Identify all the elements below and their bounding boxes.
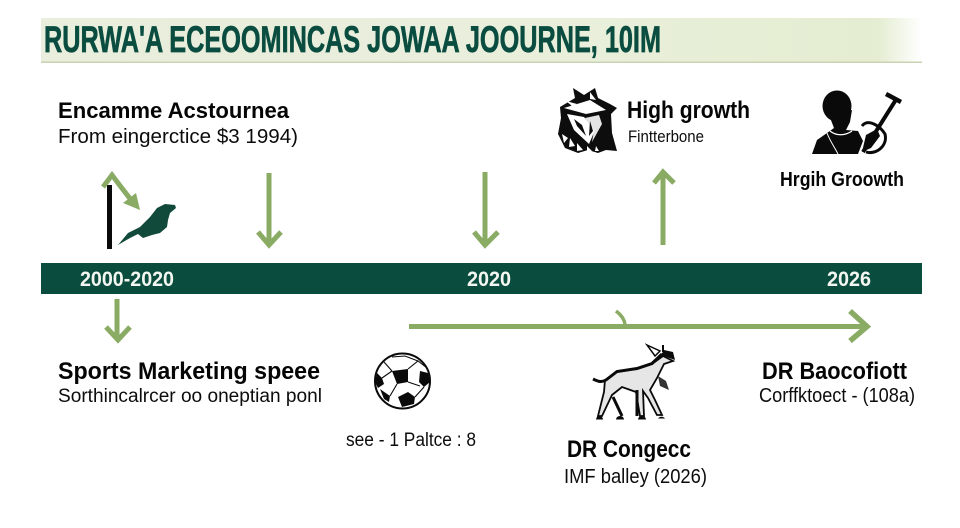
text block: dr congo: IMF balley (2026) — [564, 466, 707, 488]
text block: high growth — [627, 97, 750, 146]
text block: sports marketing — [58, 358, 322, 407]
text block: sports marketing: Sorthincalrcer oo oneptian ponl — [58, 386, 322, 407]
year label 2000-2020: 2000-2020 — [80, 268, 174, 291]
arrow: down below bar — [106, 299, 130, 340]
text block: high growth: High growth — [627, 97, 750, 124]
timeline bar — [41, 263, 922, 294]
text block: high growth: Fintterbone — [628, 127, 704, 146]
title banner — [41, 18, 922, 63]
icon: person with tool — [812, 90, 901, 154]
text block: dr congo — [564, 436, 707, 488]
text block: dr conflict: Corffktoect - (108a) — [759, 385, 915, 407]
arrow: up — [654, 172, 674, 245]
text block: dr congo: DR Congecc — [567, 436, 691, 463]
year label 2026: 2026 — [827, 268, 871, 291]
title: RURWA'A ECEOOMINCAS JOWAA JOOURNE, 10IM — [44, 19, 661, 60]
arrow: down 1 — [258, 173, 281, 245]
text: ball caption: see - 1 Paltce : 8 — [346, 430, 476, 451]
text block: sports marketing: Sports Marketing speee — [58, 358, 320, 385]
arrow: horizontal timeline — [409, 311, 867, 341]
icon: soccer ball — [375, 354, 430, 408]
text block: dr conflict: DR Baocofiott — [762, 358, 907, 385]
icon: map with flag and arrows — [103, 175, 176, 249]
text block: economic beginnings: Encamme Acstournea — [58, 98, 290, 123]
icon: crest shield — [558, 88, 617, 153]
text: high growth label: Hrgih Groowth — [780, 169, 904, 191]
text block: economic beginnings — [58, 98, 298, 148]
icon: antelope — [593, 345, 675, 420]
year label 2020: 2020 — [467, 268, 511, 291]
text block: economic beginnings: From eingerctice $3 1994) — [58, 126, 298, 148]
text block: dr conflict — [759, 358, 915, 407]
arrow: down 2 — [474, 172, 498, 245]
